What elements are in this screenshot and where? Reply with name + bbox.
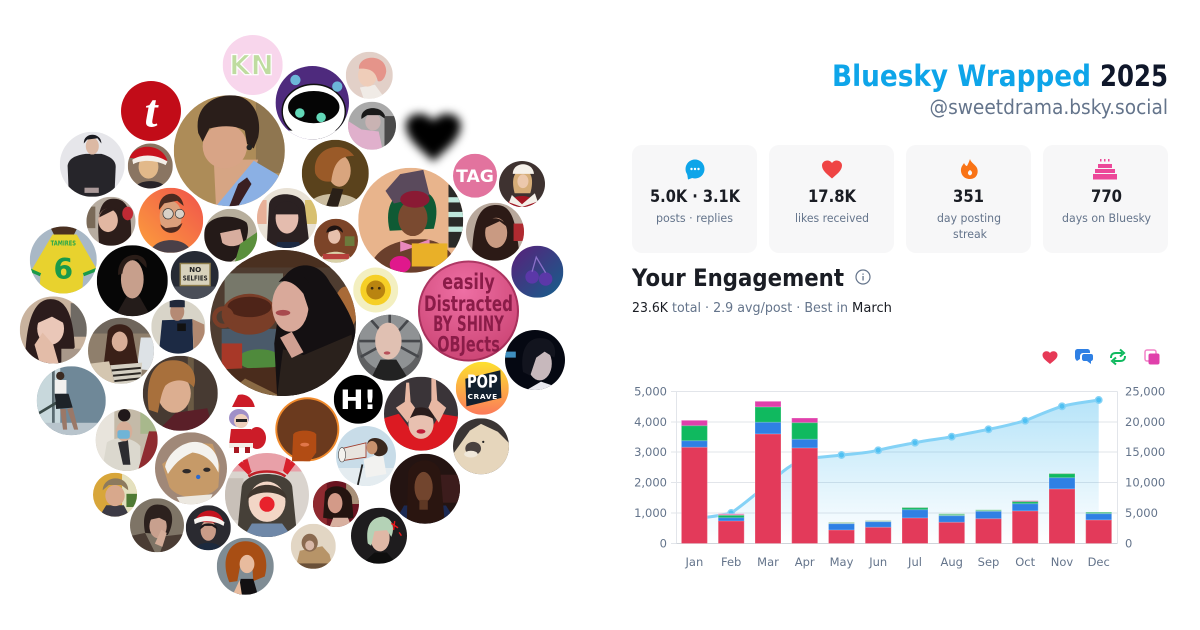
right axis labels: 20,000 bbox=[1125, 415, 1165, 429]
month labels: May bbox=[830, 555, 854, 569]
left axis labels bbox=[634, 384, 667, 550]
avatar: black and white with pink shirt bbox=[348, 102, 396, 150]
left axis labels: 2,000 bbox=[634, 476, 667, 490]
avatar: H! logo: H! bbox=[340, 385, 376, 416]
label: streak: streak bbox=[953, 227, 987, 241]
avatar: red t logo: t bbox=[144, 86, 159, 138]
legend: likes bbox=[1042, 351, 1058, 364]
left axis labels: 0 bbox=[660, 536, 667, 550]
right axis labels: 0 bbox=[1125, 536, 1132, 550]
avatar: purple cherries bbox=[511, 246, 563, 298]
avatar: POP CRAVE logo bbox=[456, 362, 509, 415]
month labels: Feb bbox=[721, 555, 741, 569]
icon: chat bubble bbox=[686, 160, 704, 180]
right axis labels bbox=[1125, 384, 1165, 550]
month labels: Jul bbox=[907, 555, 922, 569]
avatar: easily distracted button bbox=[418, 260, 519, 362]
value: streak: 351 bbox=[953, 187, 984, 206]
label: likes: likes received bbox=[795, 211, 869, 225]
bar: Mar bbox=[755, 401, 781, 544]
avatar: easily distracted button: OBJects bbox=[437, 332, 500, 357]
title: Bluesky Wrapped bbox=[832, 59, 1091, 93]
avatar: woman with braids bbox=[390, 454, 460, 524]
avatar: woman with megaphone bbox=[336, 426, 396, 486]
avatar: POP CRAVE logo: CRAVE bbox=[467, 392, 497, 401]
avatar: auburn haired woman bbox=[302, 140, 369, 207]
bar: Feb bbox=[718, 514, 744, 544]
handle: @sweetdrama.bsky.social bbox=[930, 95, 1168, 119]
avatar: santa chibi bbox=[229, 395, 266, 453]
avatar: yellow Brazil jersey: TAMIRES bbox=[51, 238, 76, 247]
label: streak: day posting bbox=[937, 211, 1001, 225]
avatar: orange haired man bbox=[143, 356, 218, 431]
avatar: girl with red bow bbox=[86, 197, 136, 246]
avatar: afro illustration bbox=[275, 397, 339, 461]
avatar cluster bbox=[20, 35, 565, 595]
avatar: girl with red nose and antlers bbox=[225, 453, 309, 537]
left axis labels: 1,000 bbox=[634, 506, 667, 520]
avatar: H! logo bbox=[334, 375, 383, 424]
month labels: Nov bbox=[1051, 555, 1073, 569]
avatar: red t logo bbox=[121, 81, 181, 141]
avatar: man in black on grey bbox=[60, 132, 125, 197]
stat card: streak bbox=[906, 145, 1031, 253]
month labels: Jun bbox=[868, 555, 887, 569]
engagement summary: total · 2.9 avg/post · Best in bbox=[672, 300, 848, 316]
bar: May bbox=[828, 522, 854, 544]
month labels: Aug bbox=[940, 555, 963, 569]
engagement summary: March bbox=[852, 300, 892, 316]
avatar: cartoon man on orange bbox=[138, 188, 203, 253]
avatar: man on black bbox=[97, 245, 168, 316]
avatar: KN logo: KN bbox=[229, 49, 274, 82]
avatar: man with santa hat bbox=[186, 505, 231, 550]
stat card: days on Bluesky bbox=[1043, 145, 1168, 253]
avatar: blond with santa hat bbox=[128, 144, 173, 188]
legend: reposts bbox=[1111, 350, 1125, 364]
chart legend icons bbox=[1042, 349, 1160, 364]
avatar: woman on sofa in stripes bbox=[88, 318, 154, 384]
right axis labels: 25,000 bbox=[1125, 384, 1165, 398]
avatar: no selfies cap: SELFIES bbox=[183, 274, 208, 282]
month labels: Mar bbox=[757, 555, 779, 569]
bar: Nov bbox=[1049, 473, 1075, 544]
avatar: blurred black heart bbox=[406, 114, 461, 162]
avatar: white dog bbox=[453, 418, 509, 474]
month labels: Sep bbox=[978, 555, 999, 569]
engagement summary: 23.6K bbox=[632, 300, 669, 316]
avatar: sunflower bbox=[353, 268, 398, 312]
bar: Dec bbox=[1086, 512, 1112, 544]
avatar: girl with bangs bbox=[257, 188, 317, 248]
bar: Sep bbox=[976, 510, 1002, 544]
icon: heart bbox=[822, 160, 842, 178]
avatar: monkey bbox=[291, 524, 336, 569]
avatar: chopper cartoon bbox=[155, 432, 227, 504]
label: streak bbox=[937, 211, 1001, 241]
avatar: yellow Brazil jersey bbox=[30, 226, 97, 294]
icon: flame bbox=[961, 159, 978, 179]
avatar: woman smoking dark hair bbox=[130, 498, 184, 552]
left axis labels: 4,000 bbox=[634, 415, 667, 429]
heading: Your Engagement: Your Engagement bbox=[631, 264, 844, 292]
avatar: man in blue shirt bbox=[174, 95, 285, 206]
avatar: hanfu woman bbox=[314, 219, 358, 263]
legend: replies bbox=[1075, 349, 1093, 364]
value: days: 770 bbox=[1091, 187, 1122, 206]
avatar: woman with green wig and hat bbox=[358, 168, 463, 273]
avatar: brunette woman bbox=[466, 203, 524, 261]
avatar: KN logo bbox=[223, 35, 283, 95]
avatar: older blond man bbox=[93, 473, 137, 517]
title: 2025 bbox=[1100, 59, 1168, 93]
right axis labels: 15,000 bbox=[1125, 445, 1165, 459]
avatar: full body by window bbox=[37, 366, 106, 435]
bar: Jun bbox=[865, 520, 891, 544]
stat card: likes bbox=[769, 145, 894, 253]
avatar: big woman in cafe bbox=[210, 250, 357, 396]
bar: Apr bbox=[792, 418, 818, 544]
avatar: yellow Brazil jersey: 6 bbox=[54, 253, 73, 286]
icon: cake bbox=[1093, 159, 1117, 180]
right axis labels: 10,000 bbox=[1125, 476, 1165, 490]
avatar: POP CRAVE logo: POP bbox=[467, 371, 498, 392]
avatar: easily distracted button: Distracted bbox=[424, 292, 513, 317]
left axis labels: 3,000 bbox=[634, 445, 667, 459]
bar: Jan bbox=[681, 420, 707, 544]
avatar: girl with green top bbox=[204, 209, 257, 262]
avatar: TAG logo: TAG bbox=[456, 166, 494, 186]
stat card: posts and replies bbox=[632, 145, 757, 253]
icon: info bbox=[856, 270, 870, 284]
avatar: TAG logo bbox=[453, 154, 497, 198]
bar: Aug bbox=[939, 514, 965, 544]
cumulative area and line bbox=[694, 397, 1102, 544]
legend: quotes bbox=[1145, 350, 1160, 364]
avatar: red lit girl bbox=[313, 481, 359, 527]
value: posts replies: 5.0K · 3.1K bbox=[650, 187, 741, 206]
label: days: days on Bluesky bbox=[1062, 211, 1151, 225]
month labels: Dec bbox=[1088, 555, 1110, 569]
avatar: selfie girl bbox=[20, 296, 87, 364]
avatar: robot mascot bbox=[276, 66, 349, 139]
avatar: no selfies cap bbox=[171, 251, 219, 299]
month labels: Apr bbox=[795, 555, 815, 569]
month labels: Oct bbox=[1015, 555, 1036, 569]
month labels bbox=[685, 555, 1110, 569]
label: posts replies: posts · replies bbox=[656, 211, 733, 225]
avatar: pink haired profile bbox=[346, 52, 393, 99]
bar: Jul bbox=[902, 507, 928, 544]
value: likes: 17.8K bbox=[808, 187, 857, 206]
month labels: Jan bbox=[685, 555, 703, 569]
avatar: masked girl bbox=[96, 409, 158, 471]
stacked bars bbox=[681, 401, 1112, 544]
avatar: dark haired man bbox=[505, 330, 565, 390]
avatar: fan headdress woman bbox=[357, 311, 423, 381]
avatar: green haired boy bbox=[351, 508, 407, 564]
avatar: girl in red with raised fingers bbox=[384, 377, 458, 451]
avatar: man in police vest bbox=[151, 300, 205, 354]
avatar: Kim Possible bbox=[217, 538, 274, 595]
avatar: easily distracted button: BY SHINY bbox=[433, 312, 504, 337]
right axis labels: 5,000 bbox=[1125, 506, 1158, 520]
engagement chart bbox=[634, 384, 1165, 569]
left axis labels: 5,000 bbox=[634, 384, 667, 398]
avatar: no selfies cap: NO bbox=[189, 265, 201, 274]
avatar: blonde in santa costume bbox=[499, 161, 545, 207]
avatar: easily distracted button: easily bbox=[442, 270, 495, 295]
bar: Oct bbox=[1012, 501, 1038, 544]
